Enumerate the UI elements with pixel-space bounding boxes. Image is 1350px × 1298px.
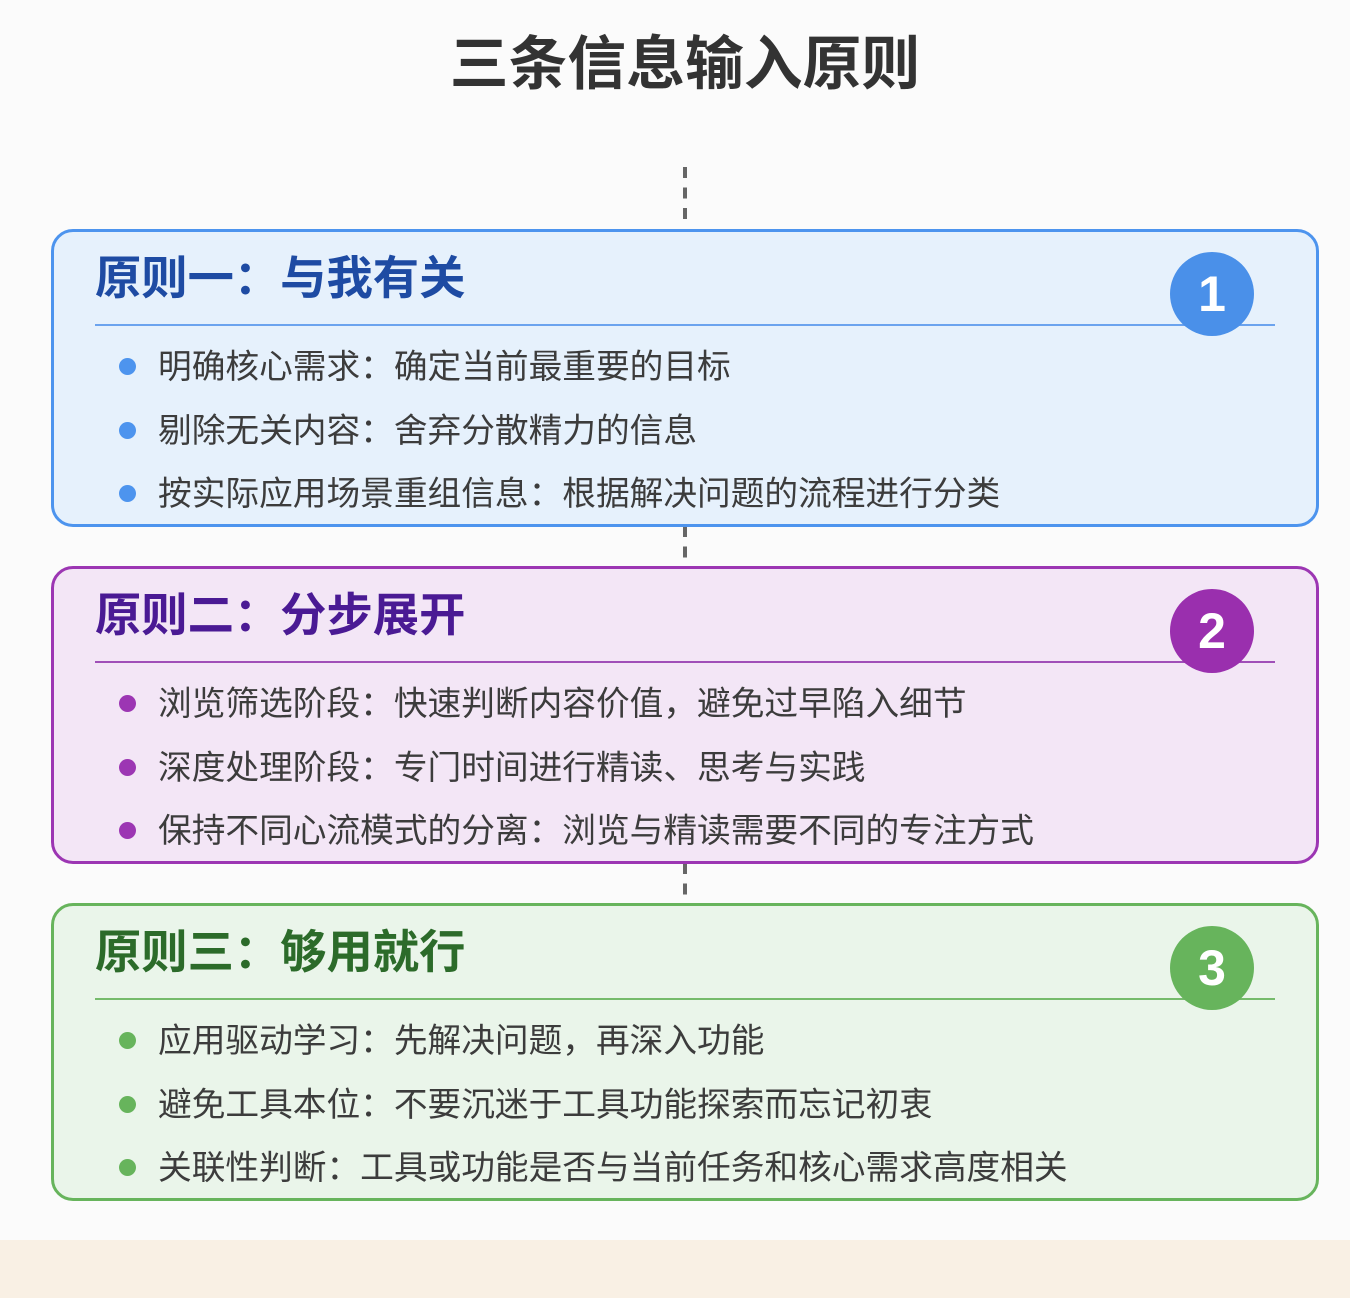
list item: application driven: 应用驱动学习：先解决问题，再深入功能	[158, 1022, 764, 1060]
list item: deep processing: 深度处理阶段：专门时间进行精读、思考与实践	[158, 748, 865, 786]
number badge 2: 2	[1198, 603, 1226, 659]
bottom band	[0, 1240, 1350, 1298]
list item: remove irrelevant: 剔除无关内容：舍弃分散精力的信息	[158, 412, 697, 450]
panel: principle three	[51, 903, 1319, 1201]
number badge 3	[1170, 926, 1254, 1010]
title: 三条信息输入原则	[450, 32, 920, 97]
heading: principle two: 原则二：分步展开	[95, 588, 465, 640]
connector: principle two to three	[683, 863, 687, 895]
divider: principle two	[95, 660, 1275, 662]
divider: principle three	[95, 998, 1275, 1000]
panel: principle one	[51, 229, 1319, 527]
number badge 2	[1170, 589, 1254, 673]
list item: core need: 明确核心需求：确定当前最重要的目标	[158, 348, 731, 386]
number badge 1	[1170, 252, 1254, 336]
list item: flow modes: 保持不同心流模式的分离：浏览与精读需要不同的专注方式	[158, 812, 1034, 850]
divider: principle one	[95, 324, 1275, 326]
list item: browsing stage: 浏览筛选阶段：快速判断内容价值，避免过早陷入细节	[158, 685, 967, 723]
connector: title to principle one	[683, 167, 687, 220]
list item: avoid tool focus: 避免工具本位：不要沉迷于工具功能探索而忘记初衷	[158, 1086, 933, 1124]
list item: reorganize: 按实际应用场景重组信息：根据解决问题的流程进行分类	[158, 474, 1000, 512]
panel: principle two	[51, 566, 1319, 864]
list item: relevance: 关联性判断：工具或功能是否与当前任务和核心需求高度相关	[158, 1148, 1068, 1186]
number badge 1: 1	[1198, 266, 1226, 322]
connector: principle one to two	[683, 526, 687, 558]
heading: principle one: 原则一：与我有关	[95, 252, 465, 304]
heading: principle three: 原则三：够用就行	[95, 926, 465, 978]
number badge 3: 3	[1198, 940, 1226, 996]
